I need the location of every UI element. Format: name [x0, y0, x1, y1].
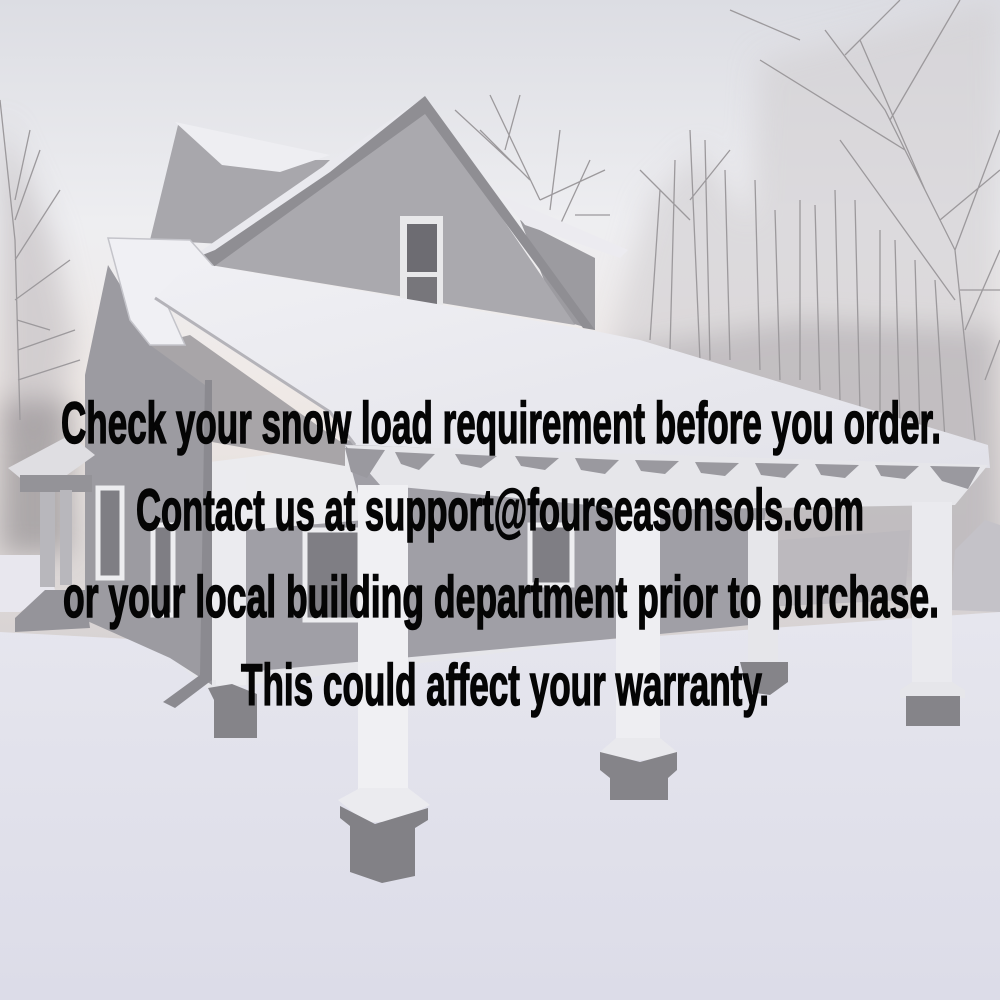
eave soffit under roof [150, 335, 345, 466]
downspout [163, 380, 212, 708]
left roof snow [108, 238, 215, 345]
fascia band [345, 445, 988, 510]
porch column: back right [740, 520, 788, 695]
gable snow [185, 96, 425, 262]
left porch structure [20, 475, 92, 492]
right dormer wall [520, 220, 595, 330]
left small porch roof [8, 435, 95, 482]
left wing wall [85, 265, 212, 685]
front wall [212, 440, 770, 680]
bushes behind porch [700, 530, 910, 610]
porch column: centre [600, 505, 677, 800]
porch column: corner [208, 470, 257, 738]
left snow patch [0, 555, 55, 612]
gable window [400, 216, 443, 308]
notice text [61, 391, 941, 718]
bare tree branches [0, 0, 1000, 440]
wall windows [98, 488, 572, 620]
main roof snow [155, 262, 990, 468]
roof edge line [155, 298, 355, 445]
snowy ground [0, 612, 1000, 1000]
steps [15, 590, 90, 632]
house [8, 96, 990, 685]
background: winter sky [0, 0, 1000, 640]
left porch posts [40, 490, 72, 587]
bush on the right [950, 520, 1000, 612]
upper rear gable [150, 125, 330, 245]
right dormer roof snow [500, 195, 628, 258]
main gable wall [210, 108, 575, 325]
tree line: distant woods on the right [0, 0, 1000, 610]
porch column: front [338, 485, 430, 883]
gable trim [185, 96, 595, 330]
rear roof snow [175, 122, 330, 172]
wall light panel [210, 445, 365, 680]
porch column: far right [900, 502, 965, 726]
roof scallop brackets [345, 448, 980, 489]
